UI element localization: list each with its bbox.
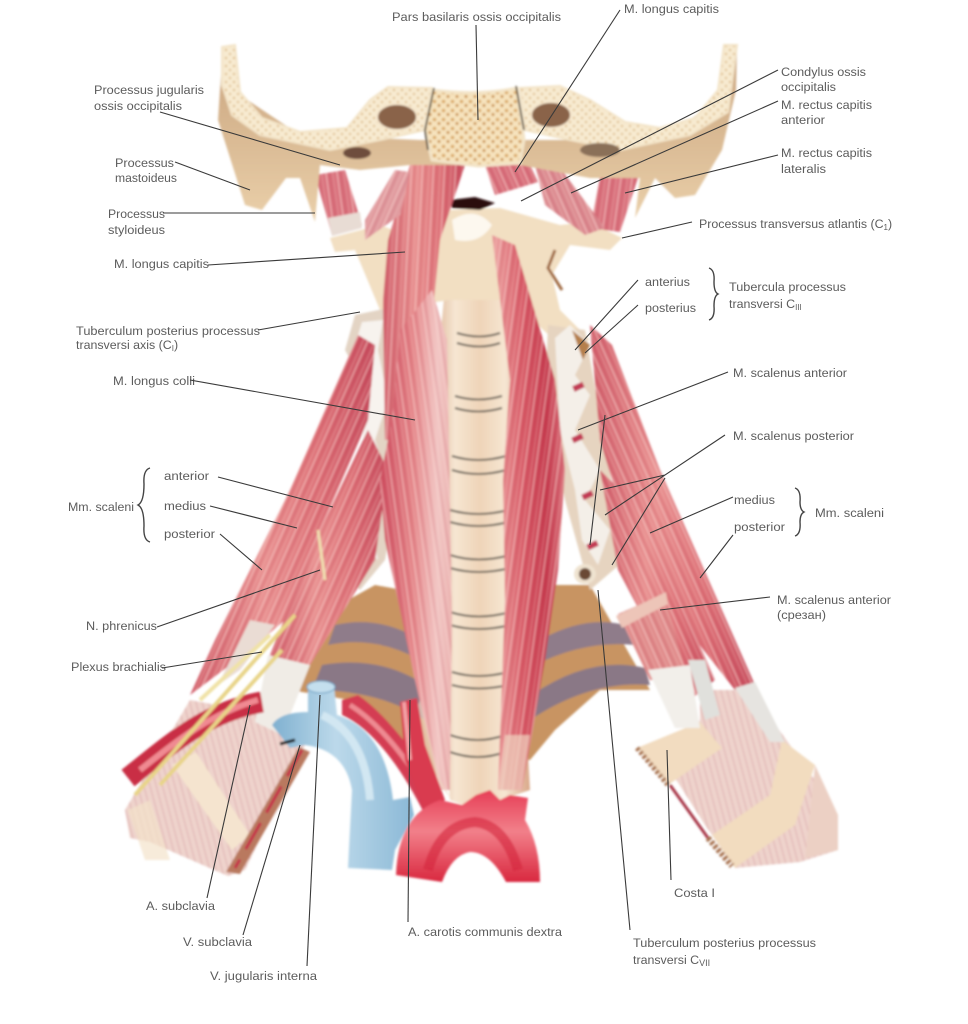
label: Tuberculum posterius processus transversi axis: transversi axis (C (76, 338, 172, 352)
right rectus capitis anterior (535, 165, 605, 235)
label: left anterior, medius, posterior: medius (164, 499, 206, 513)
phrenic nerve (318, 530, 325, 580)
label: A. subclavia: A. subclavia (146, 899, 215, 913)
label: left anterior, medius, posterior: posterior (164, 527, 215, 541)
occipital bone section left (222, 45, 432, 150)
left longus capitis (383, 165, 465, 440)
label: Processus mastoideus: mastoideus (115, 171, 177, 185)
right longus colli (492, 235, 565, 790)
dark recess left (343, 147, 371, 159)
occipital bone section right (520, 45, 737, 150)
left rectus capitis lateralis (315, 170, 362, 236)
label: M. scalenus posterior: M. scalenus posterior (733, 429, 854, 443)
label: right medius and posterior: medius (734, 493, 775, 507)
label: Mm. scaleni right: Mm. scaleni (815, 506, 884, 520)
label: M. scalenus anterior: M. scalenus anterior (733, 366, 847, 380)
label: Processus transversus atlantis: ) (888, 217, 892, 231)
label: Processus styloideus: styloideus (108, 223, 165, 237)
label: Tubercula processus transversi CIII: transversi C (729, 297, 795, 311)
label: anterius / posterius tubercula (575, 268, 718, 353)
aortic arch (396, 790, 540, 882)
label: M. rectus capitis lateralis (625, 146, 872, 193)
label: Processus transversus atlantis (622, 217, 892, 238)
label: Costa I: Costa I (674, 886, 715, 900)
label: M. longus capitis right: M. longus capitis (624, 2, 719, 16)
label: M. rectus capitis anterior (571, 98, 872, 193)
label: M. rectus capitis anterior: anterior (781, 113, 825, 127)
label: M. longus colli (113, 374, 415, 420)
label: Processus jugularis ossis occipitalis: ossis occipitalis (94, 99, 182, 113)
label: M. rectus capitis lateralis: lateralis (781, 162, 826, 176)
left longus colli (380, 290, 452, 800)
vertebral column (430, 235, 530, 810)
label: Tubercula processus transversi CIII: Tubercula processus (729, 280, 846, 294)
label: V. jugularis interna (210, 695, 320, 983)
label: left anterior, medius, posterior: anterior (164, 469, 209, 483)
label: Pars basilaris ossis occipitalis: Pars basilaris ossis occipitalis (392, 10, 561, 24)
label: anterius / posterius tubercula: posterius (645, 301, 696, 315)
label: M. scalenus anterior cut (660, 593, 891, 622)
label: Mm. scaleni left with brace (68, 468, 150, 542)
label: Processus styloideus (108, 207, 315, 237)
left scalene anterior (218, 430, 388, 735)
jugular foramen left (377, 104, 417, 130)
tubercle C7 foramen (574, 564, 596, 584)
label: Tuberculum posterius processus transversi axis: ) (174, 338, 178, 352)
label: Condylus ossis occipitalis: Condylus ossis (781, 65, 866, 79)
label: M. scalenus anterior cut: M. scalenus anterior (777, 593, 891, 607)
label: M. rectus capitis lateralis: M. rectus capitis (781, 146, 872, 160)
label: M. longus capitis right (515, 2, 719, 172)
brachial plexus (135, 615, 295, 795)
label: Processus jugularis ossis occipitalis: Processus jugularis (94, 83, 204, 97)
right rectus capitis lateralis (590, 178, 638, 232)
brachiocephalic and carotid arteries (342, 695, 445, 815)
label: A. carotis communis dextra: A. carotis communis dextra (408, 925, 562, 939)
right longus capitis stump (485, 165, 538, 195)
pleura and brown deep tissue left (290, 585, 445, 780)
label: M. rectus capitis anterior: M. rectus capitis (781, 98, 872, 112)
atlas and axis vertebrae (330, 197, 622, 345)
label: Processus mastoideus (115, 156, 250, 190)
pars basilaris block (425, 86, 524, 166)
label: Plexus brachialis (71, 652, 262, 674)
left rectus capitis anterior (365, 170, 410, 240)
label: M. scalenus anterior cut: (срезан) (777, 608, 826, 622)
label: Processus transversus atlantis: 1 (884, 223, 889, 232)
label: Tuberculum posterius processus transversi CVII: Tuberculum posterius processus (633, 936, 816, 950)
label: Processus styloideus: Processus (108, 207, 165, 221)
occipital underside (218, 45, 737, 222)
label: M. longus colli: M. longus colli (113, 374, 195, 388)
right transverse process band (545, 325, 625, 590)
label: M. longus capitis left (114, 252, 405, 271)
label: Plexus brachialis: Plexus brachialis (71, 660, 166, 674)
label: right medius and posterior: posterior (734, 520, 785, 534)
label: Condylus ossis occipitalis: occipitalis (781, 80, 836, 94)
label: N. phrenicus: N. phrenicus (86, 619, 157, 633)
label: right medius and posterior (650, 488, 804, 578)
label: Tuberculum posterius processus transversi axis: I (172, 344, 174, 353)
label: Tuberculum posterius processus transversi CVII: VII (699, 958, 710, 968)
left transverse process band (340, 308, 400, 590)
dark recess right (580, 143, 620, 157)
label: M. scalenus anterior (578, 366, 847, 430)
label: Condylus ossis occipitalis (521, 65, 866, 201)
label: Mm. scaleni left with brace: Mm. scaleni (68, 500, 134, 514)
right scalene inner muscle (600, 470, 715, 700)
label: N. phrenicus (86, 570, 320, 633)
left lower rib and intercostal muscle (125, 700, 310, 876)
right scalene medius and posterior (590, 325, 785, 742)
internal jugular and subclavian veins (272, 681, 414, 870)
label: Costa I (667, 750, 715, 900)
label: Processus transversus atlantis: Processus transversus atlantis (C (699, 217, 884, 231)
left scalene posterior and medius (190, 335, 375, 695)
label: M. scalenus posterior (600, 429, 854, 565)
label: A. subclavia (146, 705, 250, 913)
label: Tubercula processus transversi CIII: III (795, 303, 802, 312)
label: V. subclavia: V. subclavia (183, 935, 252, 949)
label: anterius / posterius tubercula: anterius (645, 275, 690, 289)
right lower rib and intercostal muscle (637, 690, 838, 868)
label: Tuberculum posterius processus transversi axis (76, 312, 360, 353)
right scalene anterior cut stump (616, 592, 720, 728)
label: Tuberculum posterius processus transversi axis: Tuberculum posterius processus (76, 324, 260, 338)
subclavian artery (128, 700, 262, 778)
label: left anterior, medius, posterior (164, 469, 333, 570)
illustration (125, 45, 838, 882)
label: V. jugularis interna: V. jugularis interna (210, 969, 317, 983)
label: V. subclavia (183, 745, 300, 949)
pleura and brown deep tissue right (510, 585, 650, 760)
label: Tuberculum posterius processus transversi CVII (590, 415, 816, 968)
label: Processus mastoideus: Processus (115, 156, 174, 170)
jugular foramen right (531, 102, 571, 128)
label: Tubercula processus transversi CIII (729, 280, 846, 312)
label: M. longus capitis left: M. longus capitis (114, 257, 209, 271)
label: Processus jugularis ossis occipitalis (94, 83, 340, 165)
label: Tuberculum posterius processus transversi CVII: transversi C (633, 953, 699, 967)
